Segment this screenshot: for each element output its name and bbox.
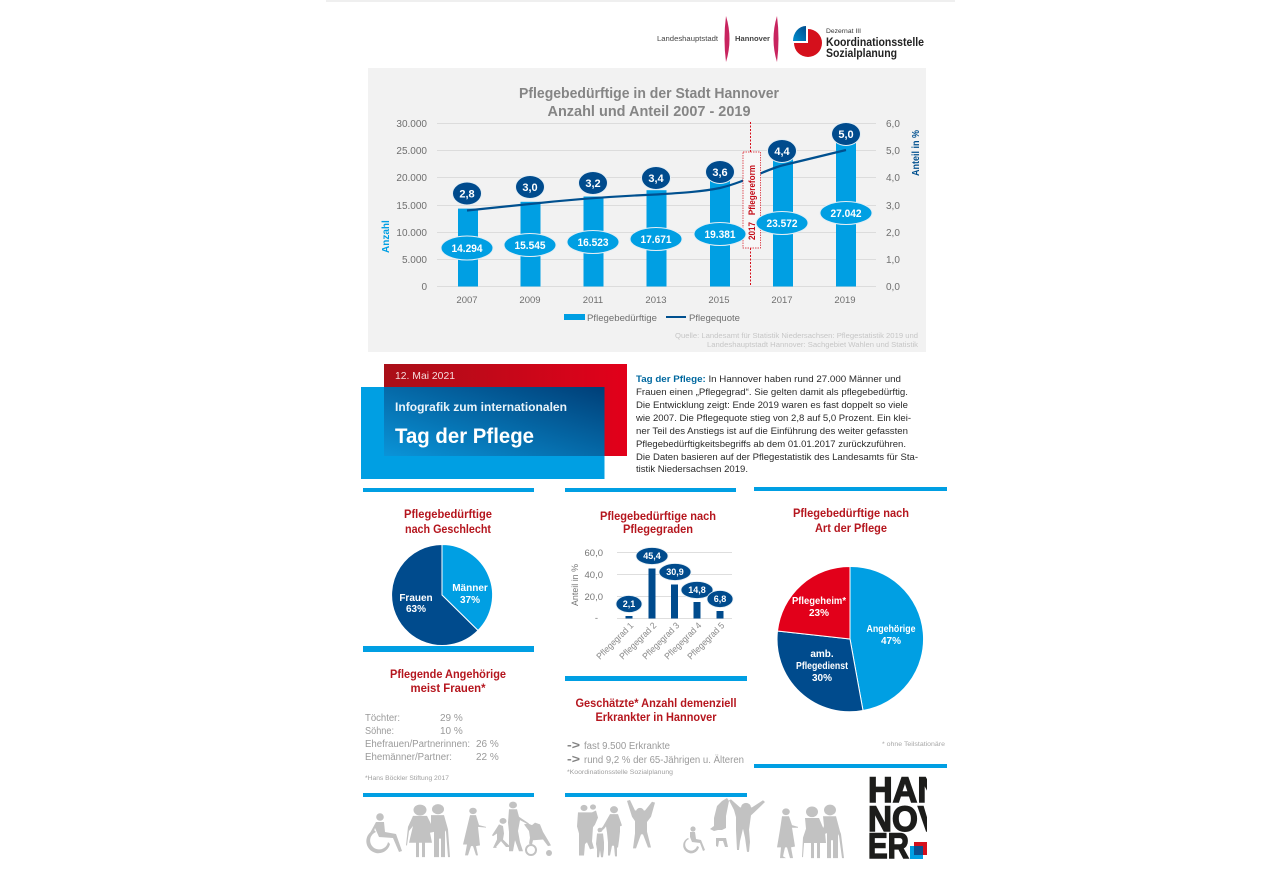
panel: Pflegebedürftige in der Stadt Hannover bbox=[368, 68, 926, 352]
percent labels: 4,4 bbox=[774, 146, 791, 158]
right axis labels: 6,0 bbox=[886, 119, 900, 130]
count labels: 15.545 bbox=[514, 240, 546, 252]
bars bbox=[458, 139, 856, 286]
heading: Erkrankter in Hannover bbox=[596, 710, 717, 724]
count labels: 19.381 bbox=[704, 229, 736, 241]
left axis labels: 15.000 bbox=[396, 201, 427, 212]
header block: Tag der Pflege: 12. Mai 2021 bbox=[395, 370, 455, 382]
line: Pflegequote bbox=[467, 150, 846, 210]
panel: nach Geschlecht bbox=[392, 507, 493, 645]
list: fast 9.500 Erkrankte bbox=[584, 741, 670, 752]
list bbox=[567, 738, 744, 766]
heading bbox=[600, 509, 716, 536]
logo: HANNOVER: NOV bbox=[868, 800, 941, 839]
footnote: *Hans Böckler Stiftung 2017 bbox=[365, 775, 449, 782]
heading: nach Geschlecht bbox=[405, 522, 491, 536]
count labels: 23.572 bbox=[766, 218, 798, 230]
right axis labels: 2,0 bbox=[886, 228, 900, 239]
list: -> bbox=[567, 752, 580, 766]
text block: Tag der Pflege: wie 2007. Die Pflegequote stieg von 2,8 auf 5,0 Prozent. Ein klei- bbox=[635, 413, 911, 424]
footnote: * ohne Teilstationäre bbox=[882, 741, 945, 748]
text block: Tag der Pflege bbox=[635, 374, 918, 475]
percent labels: 3,6 bbox=[712, 167, 728, 179]
count labels bbox=[441, 202, 872, 260]
list: Ehemänner/Partner: bbox=[365, 752, 452, 763]
logo: HANNOVER: ER bbox=[868, 827, 909, 866]
percent labels: 5,0 bbox=[838, 129, 854, 141]
heading: Art der Pflege bbox=[815, 521, 887, 535]
list: 22 % bbox=[476, 752, 499, 763]
panel: Pflegende Angehörige bbox=[365, 667, 506, 782]
source note: Quelle: Landesamt für Statistik Niedersachsen: Pflegestatistik 2019 und bbox=[675, 331, 918, 340]
left axis labels bbox=[396, 119, 427, 293]
heading: Pflegebedürftige bbox=[404, 507, 492, 521]
list: Söhne: bbox=[365, 726, 394, 737]
bar chart: 20,0 bbox=[584, 592, 603, 603]
pie chart bbox=[777, 566, 924, 712]
x axis labels: 2015 bbox=[708, 295, 730, 306]
percent labels: 3,4 bbox=[648, 173, 665, 185]
bar chart: - bbox=[595, 613, 598, 624]
right axis labels bbox=[886, 119, 900, 293]
list: -> bbox=[567, 738, 580, 752]
bar chart: 6,8 bbox=[714, 594, 726, 604]
bar chart: 2,1 bbox=[623, 599, 635, 609]
header block: Tag der Pflege bbox=[361, 364, 627, 479]
list: 26 % bbox=[476, 739, 499, 750]
chart title: Pflegebedürftige in der Stadt Hannover bbox=[519, 85, 779, 102]
chart title: Anzahl und Anteil 2007 - 2019 bbox=[548, 103, 750, 120]
panel: nach Art der Pflege: 47% bbox=[881, 636, 901, 647]
count labels: 17.671 bbox=[640, 234, 672, 246]
heading bbox=[793, 506, 909, 535]
text block: Tag der Pflege: Pflegebedürftigkeitsbegriffs ab dem 01.01.2017 zurückzuführen. bbox=[636, 439, 906, 450]
pie chart: 37% bbox=[460, 595, 480, 606]
left axis labels: 30.000 bbox=[396, 119, 427, 130]
count labels: 27.042 bbox=[830, 208, 862, 220]
count labels: 14.294 bbox=[452, 243, 483, 255]
source note: Landeshauptstadt Hannover: Sachgebiet Wahlen und Statistik bbox=[707, 340, 918, 349]
bar chart: Pflegegrad 1 bbox=[594, 620, 635, 661]
heading: Pflegebedürftige nach bbox=[793, 506, 909, 520]
icon: people silhouettes left bbox=[366, 802, 552, 857]
list: rund 9,2 % der 65-Jährigen u. Älteren bbox=[584, 754, 744, 766]
heading: Pflegebedürftige nach bbox=[600, 509, 716, 523]
heading: meist Frauen* bbox=[410, 681, 486, 695]
text block: Tag der Pflege: ner Teil des Anstiegs ist auf die Einführung des weiter gefassten bbox=[636, 426, 908, 437]
logo: HANNOVER bbox=[869, 776, 927, 859]
reform marker: 2017 Pflegereform bbox=[747, 165, 757, 240]
pie chart: Männer bbox=[452, 583, 488, 594]
header block: Tag der Pflege: Tag der Pflege bbox=[395, 425, 534, 448]
bar chart: 60,0 bbox=[584, 548, 603, 559]
logo: Koordinationsstelle Sozialplanung: Sozialplanung bbox=[826, 46, 897, 60]
x axis labels: 2013 bbox=[645, 295, 667, 306]
bar chart: 14,8 bbox=[688, 585, 706, 595]
text block: Tag der Pflege: Tag der Pflege: In Hannover haben rund 27.000 Männer und bbox=[636, 374, 901, 385]
text block: Tag der Pflege: tistik Niedersachsen 2019. bbox=[636, 464, 748, 475]
footnote: *Koordinationsstelle Sozialplanung bbox=[567, 769, 673, 776]
percent labels: 3,0 bbox=[522, 182, 538, 194]
right axis labels: 4,0 bbox=[886, 173, 900, 184]
bar chart: Anteil in % bbox=[570, 564, 580, 606]
panel: nach Art der Pflege: Pflegedienst bbox=[796, 661, 849, 672]
text block: Tag der Pflege: Die Entwicklung zeigt: Ende 2019 waren es fast doppelt so viele bbox=[636, 400, 908, 411]
pie chart bbox=[392, 544, 493, 645]
panel: nach Art der Pflege: amb. bbox=[810, 649, 834, 660]
list bbox=[365, 713, 499, 763]
icon: people silhouettes right bbox=[683, 798, 844, 858]
chart title bbox=[519, 85, 779, 120]
right axis labels: 0,0 bbox=[886, 282, 900, 293]
panel: Demenz bbox=[567, 696, 744, 776]
heading bbox=[404, 507, 492, 536]
axis title: Anteil in %: Anteil in % bbox=[911, 130, 922, 176]
left axis labels: 10.000 bbox=[396, 228, 427, 239]
x axis labels: 2019 bbox=[834, 295, 856, 306]
bar chart: Pflegegrad 3 bbox=[640, 620, 681, 661]
panel: nach Art der Pflege: Angehörige bbox=[866, 624, 916, 635]
x axis labels: 2009 bbox=[519, 295, 541, 306]
heading: Pflegegraden bbox=[623, 522, 693, 536]
bar chart: 45,4 bbox=[643, 551, 661, 561]
logo: Landeshauptstadt Hannover bbox=[657, 16, 778, 62]
list: 10 % bbox=[440, 726, 463, 737]
bar chart: 30,9 bbox=[666, 567, 684, 577]
logo: Landeshauptstadt Hannover: Hannover bbox=[735, 34, 770, 43]
heading bbox=[576, 696, 736, 724]
x axis labels: 2007 bbox=[456, 295, 478, 306]
left axis labels: 20.000 bbox=[396, 173, 427, 184]
logo: Koordinationsstelle Sozialplanung bbox=[793, 26, 924, 60]
panel: nach Art der Pflege bbox=[777, 506, 945, 748]
text block: Tag der Pflege: Frauen einen „Pflegegrad“. Sie gelten damit als pflegebedürftig. bbox=[636, 387, 908, 398]
panel: nach Art der Pflege: 23% bbox=[809, 608, 829, 619]
source note bbox=[675, 331, 918, 349]
right axis labels: 3,0 bbox=[886, 201, 900, 212]
panel: nach Pflegegraden bbox=[570, 509, 733, 661]
legend: Pflegequote bbox=[689, 313, 740, 324]
legend bbox=[564, 313, 740, 324]
count labels: 16.523 bbox=[578, 237, 608, 249]
left axis labels: 25.000 bbox=[396, 146, 427, 157]
right axis labels: 1,0 bbox=[886, 255, 900, 266]
text block: Tag der Pflege: Die Daten basieren auf der Pflegestatistik des Landesamts für Sta- bbox=[636, 452, 918, 463]
axis title: Anzahl: Anzahl bbox=[381, 220, 392, 253]
panel: nach Art der Pflege: Pflegeheim* bbox=[792, 596, 846, 607]
x axis labels: 2011 bbox=[583, 295, 603, 306]
left axis labels: 5.000 bbox=[402, 255, 427, 266]
heading bbox=[390, 667, 506, 695]
heading: Geschätzte* Anzahl demenziell bbox=[576, 696, 736, 710]
bar chart: Pflegegrad 2 bbox=[617, 620, 658, 661]
logo: Koordinationsstelle Sozialplanung: Dezernat III bbox=[826, 28, 861, 35]
reform marker bbox=[743, 122, 760, 286]
pie chart: 63% bbox=[406, 604, 426, 615]
x axis labels bbox=[456, 295, 856, 306]
left axis labels: 0 bbox=[421, 282, 427, 293]
list: Töchter: bbox=[365, 713, 400, 724]
percent labels: 2,8 bbox=[459, 188, 475, 200]
right axis labels: 5,0 bbox=[886, 146, 900, 157]
x axis labels: 2017 bbox=[771, 295, 793, 306]
logo: HANNOVER: HAN bbox=[868, 771, 942, 810]
percent labels: 3,2 bbox=[585, 178, 601, 190]
list: Ehefrauen/Partnerinnen: bbox=[365, 739, 470, 750]
logo: Koordinationsstelle Sozialplanung: Koordinationsstelle bbox=[826, 35, 924, 49]
percent labels bbox=[452, 122, 860, 205]
pie chart: Frauen bbox=[399, 593, 433, 604]
heading: Pflegende Angehörige bbox=[390, 667, 506, 681]
bar chart: 40,0 bbox=[584, 570, 603, 581]
bar chart bbox=[570, 548, 733, 661]
list: 29 % bbox=[440, 713, 463, 724]
legend: Pflegebedürftige bbox=[587, 313, 657, 324]
bar chart: Pflegegrad 4 bbox=[662, 620, 703, 661]
header block: Tag der Pflege: Infografik zum internationalen bbox=[395, 400, 567, 414]
panel: nach Art der Pflege: 30% bbox=[812, 673, 832, 684]
icon: family silhouettes bbox=[577, 800, 655, 857]
bar chart: Pflegegrad 5 bbox=[685, 620, 726, 661]
logo: Landeshauptstadt Hannover: Landeshauptstadt bbox=[657, 34, 719, 43]
